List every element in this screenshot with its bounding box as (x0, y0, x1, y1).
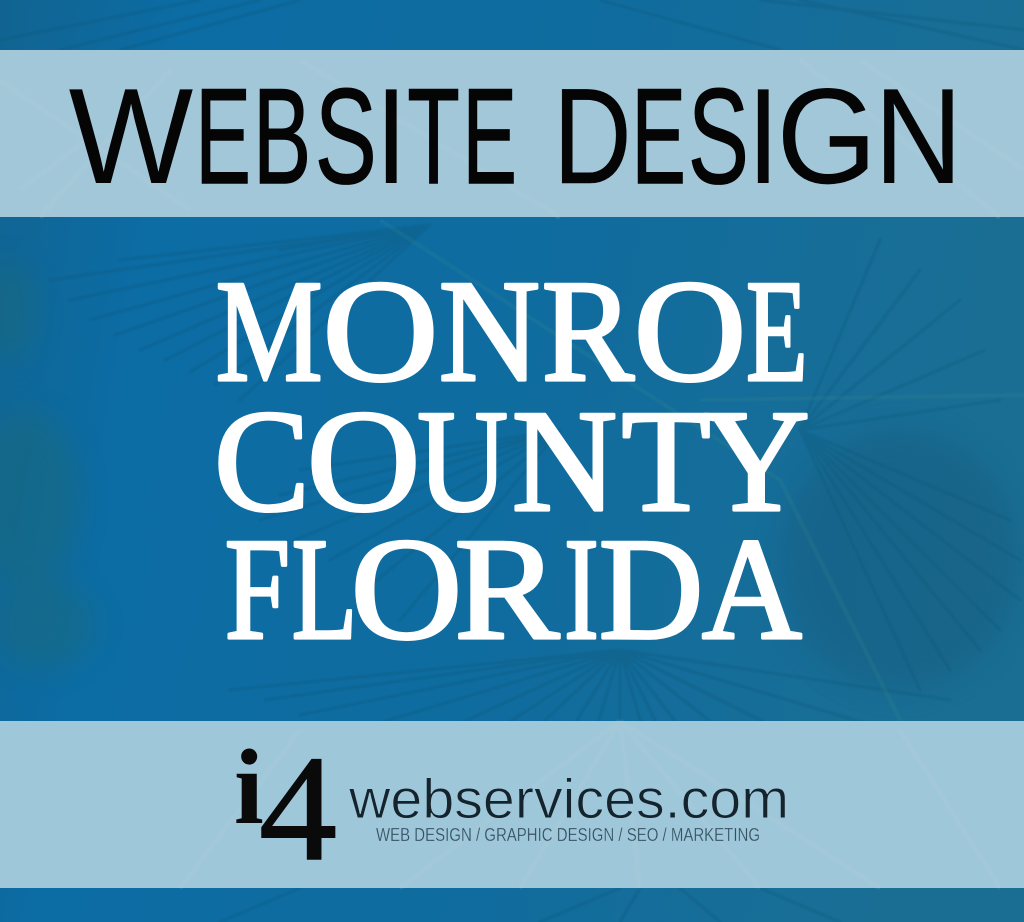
title line: Florida (225, 508, 802, 670)
heading: website design: I (747, 60, 779, 212)
title line: Monroe: M (216, 250, 323, 412)
title line: Florida: F (225, 508, 290, 670)
title line: County: N (512, 380, 617, 542)
title line: County: T (622, 380, 711, 542)
heading: website design: B (253, 60, 311, 212)
top band (0, 50, 1024, 217)
title line: Florida: D (599, 508, 703, 670)
logo tagline: WEB DESIGN / GRAPHIC DESIGN / SEO / MARKETING (376, 825, 760, 845)
heading: website design: S (315, 60, 377, 212)
title line: County: O (307, 380, 420, 542)
heading: website design: G (776, 60, 877, 212)
title line: Florida: I (564, 508, 599, 670)
heading: website design: S (688, 60, 749, 212)
heading: website design (69, 60, 963, 212)
heading: website design: W (69, 60, 193, 212)
heading: website design: E (462, 60, 517, 212)
bottom band (0, 721, 1024, 888)
logo: i4 webservices.com (234, 724, 789, 892)
title line: Florida: A (702, 508, 802, 670)
icon: i4 mark: i (234, 729, 264, 847)
heading: website design: I (375, 60, 407, 212)
title: Monroe County Florida (214, 250, 810, 670)
title line: Monroe: O (322, 250, 438, 412)
title line: Monroe: N (439, 250, 540, 412)
icon: i4 mark: 4 (259, 724, 337, 892)
title line: County: C (214, 380, 310, 542)
heading: website design: D (553, 60, 632, 212)
title line: Florida: R (454, 508, 560, 670)
heading: website design: N (874, 60, 963, 212)
title line: Florida: O (351, 508, 462, 670)
title line: Monroe: O (634, 250, 746, 412)
title line: Monroe: R (542, 250, 635, 412)
title line: County (214, 380, 810, 542)
title line: Monroe: E (746, 250, 808, 412)
heading: website design: T (407, 60, 460, 212)
logo wordmark: webservices.com (348, 767, 789, 830)
heading: website design: E (195, 60, 251, 212)
title line: Monroe (216, 250, 808, 412)
title line: Florida: L (292, 508, 357, 670)
title line: County: U (417, 380, 508, 542)
heading: website design: E (632, 60, 686, 212)
title line: County: Y (703, 380, 810, 542)
